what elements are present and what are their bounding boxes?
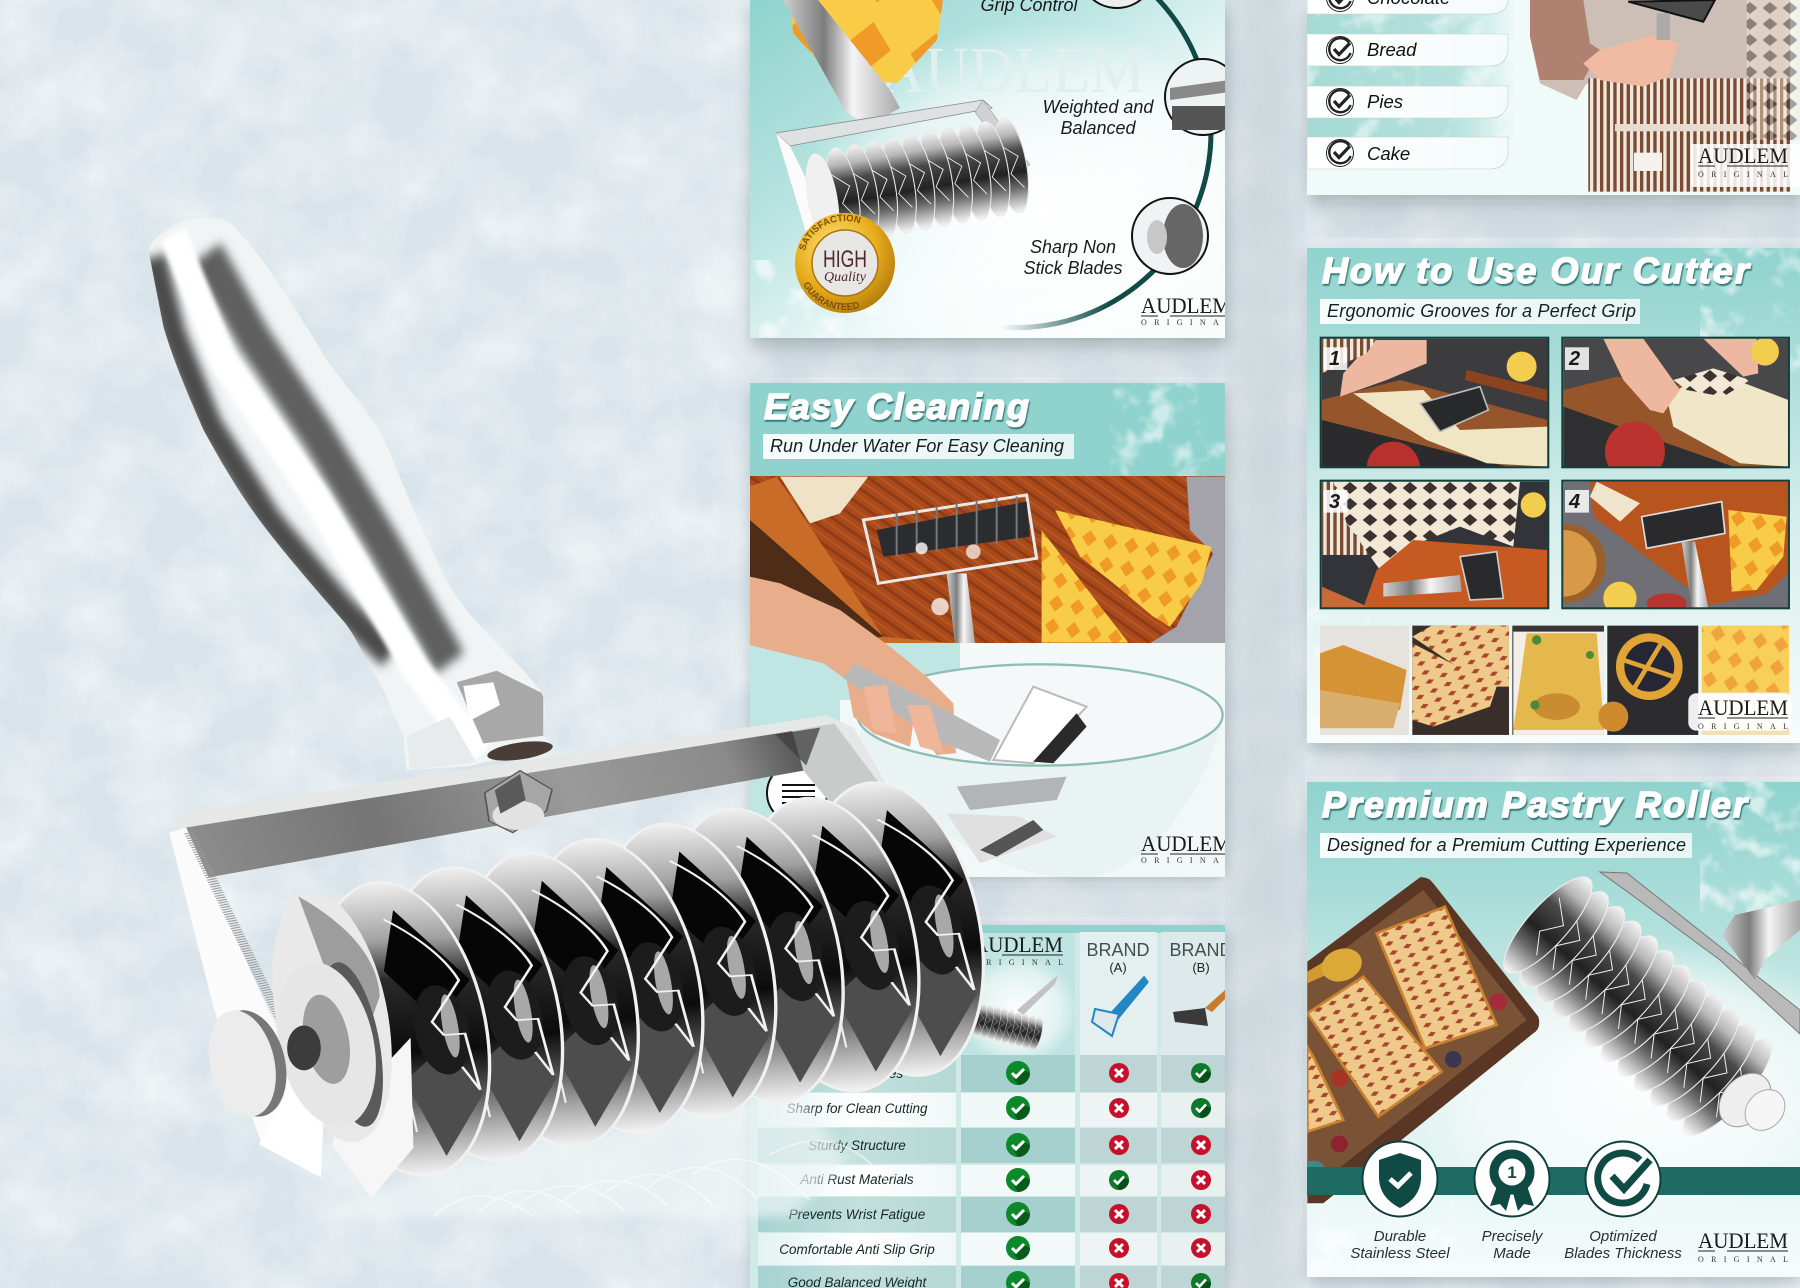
list item: bread bbox=[1307, 34, 1508, 66]
bowl and hand bbox=[750, 577, 1223, 878]
food thumbnail 3 bbox=[1512, 626, 1604, 735]
step numbers bbox=[1329, 348, 1580, 513]
logo: ORIGINAL bbox=[1141, 318, 1231, 327]
row labels: Sturdy Structure bbox=[808, 1138, 906, 1153]
hero front disc and end cap bbox=[201, 888, 413, 1198]
hero bracket bbox=[169, 716, 896, 1144]
list item: chocolate bbox=[1307, 0, 1508, 14]
panel: premium pastry roller bbox=[1302, 782, 1800, 1283]
label: weighted and balanced: Balanced bbox=[1060, 118, 1137, 138]
logo: ORIGINAL bbox=[1698, 1255, 1788, 1264]
row labels bbox=[779, 1066, 935, 1288]
list item: cake: Cake bbox=[1367, 143, 1410, 164]
hero blades bbox=[293, 777, 1005, 1181]
badge: high quality: SATISFACTION bbox=[799, 214, 861, 250]
logo: AUDLEM bbox=[1698, 143, 1788, 168]
step numbers: 3 bbox=[1329, 491, 1340, 513]
pie on roller bbox=[790, 0, 943, 83]
hero product: pastry lattice roller bbox=[130, 200, 1005, 1217]
callout circle: grip bbox=[1092, 0, 1142, 9]
badge: high quality: Quality bbox=[824, 270, 867, 285]
ribbon band bbox=[1307, 1167, 1800, 1195]
food thumbnail 1 bbox=[1320, 626, 1409, 735]
logo: ORIGINAL bbox=[973, 958, 1063, 967]
label: sharp non stick blades: Sharp Non bbox=[1030, 237, 1116, 257]
logo bbox=[1698, 1228, 1788, 1264]
row labels: Prevents Wrist Fatigue bbox=[789, 1207, 925, 1222]
subtitle band: Ergonomic Grooves for a Perfect Grip bbox=[1327, 301, 1636, 321]
badge: high quality: HIGH bbox=[823, 246, 867, 273]
step photo 3 bbox=[1321, 481, 1548, 608]
logo: AUDLEM bbox=[1698, 1228, 1788, 1253]
caption: precisely made: Precisely bbox=[1482, 1228, 1542, 1245]
row labels: Sharp for Clean Cutting bbox=[786, 1101, 928, 1116]
callout circle: weighted bbox=[1164, 58, 1225, 136]
heading: How to Use Our Cutter bbox=[1322, 250, 1751, 291]
badge: high quality: GUARANTEED bbox=[804, 282, 859, 310]
callout circle: blades bbox=[1132, 198, 1208, 274]
icons: brand A column bbox=[1109, 1063, 1129, 1288]
logo bbox=[1141, 836, 1225, 863]
product: our roller bbox=[971, 975, 1058, 1052]
heading: Easy Cleaning bbox=[764, 386, 1029, 427]
table rows bbox=[758, 1055, 1225, 1288]
logo: AUDLEM bbox=[1698, 695, 1788, 720]
logo: AUDLEM bbox=[1141, 831, 1231, 856]
panel: comparison table bbox=[750, 925, 1233, 1288]
logo bbox=[1698, 143, 1788, 179]
subtitle band: Run Under Water For Easy Cleaning bbox=[770, 436, 1064, 456]
heading: Premium Pastry Roller bbox=[1322, 784, 1749, 825]
list item: pies: Pies bbox=[1367, 91, 1403, 112]
logo: ORIGINAL bbox=[1141, 856, 1231, 865]
panel: key features bbox=[744, 0, 1236, 354]
product: brand B tool bbox=[1173, 990, 1225, 1026]
photo: cutter and pie on board bbox=[750, 476, 1227, 643]
caption: precisely made: Made bbox=[1493, 1245, 1531, 1262]
icons: our brand column bbox=[1006, 1061, 1030, 1288]
step photo 1 bbox=[1321, 338, 1548, 495]
step numbers: 1 bbox=[1329, 348, 1340, 370]
badge: high quality bbox=[795, 213, 895, 313]
product: brand A tool bbox=[1092, 978, 1147, 1036]
label: weighted and balanced: Weighted and bbox=[1043, 97, 1153, 117]
icon: check ring bbox=[1586, 1142, 1660, 1216]
caption: durable stainless steel: Stainless Steel bbox=[1350, 1245, 1450, 1262]
subtitle band: Designed for a Premium Cutting Experience bbox=[1327, 835, 1686, 855]
logo bbox=[1141, 298, 1225, 325]
label: sharp non stick blades: Stick Blades bbox=[1023, 258, 1123, 278]
icon: shield bbox=[1362, 1142, 1438, 1216]
step numbers: 4 bbox=[1568, 491, 1580, 513]
logo bbox=[984, 938, 1063, 965]
panel: easy cleaning bbox=[750, 383, 1231, 880]
icon: rosette: 1 bbox=[1507, 1163, 1517, 1182]
food thumbnail 5 bbox=[1702, 626, 1789, 735]
icon: rosette bbox=[1474, 1142, 1550, 1216]
icons: brand B column bbox=[1191, 1063, 1211, 1288]
hero reflection bbox=[315, 1089, 888, 1217]
header: brand B: (B) bbox=[1192, 960, 1210, 975]
step photo 2 bbox=[1562, 338, 1789, 482]
row labels: Anti Rust Materials bbox=[799, 1172, 914, 1187]
caption: optimized blades thickness: Blades Thickness bbox=[1564, 1245, 1682, 1262]
icon: document badge bbox=[766, 770, 828, 812]
cutting board with pastries bbox=[1302, 877, 1539, 1203]
step photo 4 bbox=[1527, 481, 1789, 615]
watermark brand: AUDLEM bbox=[880, 34, 1145, 107]
list item: bread: Bread bbox=[1367, 39, 1417, 60]
header: brand B: BRAND bbox=[1169, 940, 1233, 960]
product roller bbox=[776, 100, 1035, 249]
food thumbnail 4 bbox=[1598, 626, 1698, 735]
hero collar and bolt bbox=[484, 738, 556, 833]
logo: ORIGINAL bbox=[1698, 722, 1788, 731]
logo: AUDLEM bbox=[1141, 293, 1231, 318]
hero handle bbox=[130, 200, 610, 800]
panel: uses list bbox=[1307, 0, 1800, 203]
panel: how to use bbox=[1307, 248, 1800, 750]
list item: pies bbox=[1307, 86, 1508, 118]
header: brand A: BRAND bbox=[1086, 940, 1150, 960]
arc line bbox=[1000, 0, 1211, 328]
photo: person holding cutter bbox=[1530, 0, 1800, 192]
logo: AUDLEM bbox=[973, 932, 1063, 957]
logo bbox=[1698, 695, 1788, 731]
caption: durable stainless steel: Durable bbox=[1374, 1228, 1426, 1245]
row labels: Durable Blades bbox=[811, 1066, 903, 1081]
large roller bbox=[1492, 866, 1800, 1146]
list item: cake bbox=[1307, 137, 1508, 169]
step numbers: 2 bbox=[1568, 348, 1580, 370]
row labels: Comfortable Anti Slip Grip bbox=[779, 1242, 935, 1257]
logo: ORIGINAL bbox=[1698, 170, 1788, 179]
roller handle bbox=[783, 0, 900, 126]
food thumbnail 2 bbox=[1412, 626, 1509, 735]
caption: optimized blades thickness: Optimized bbox=[1589, 1228, 1657, 1245]
header: brand A: (A) bbox=[1109, 960, 1127, 975]
